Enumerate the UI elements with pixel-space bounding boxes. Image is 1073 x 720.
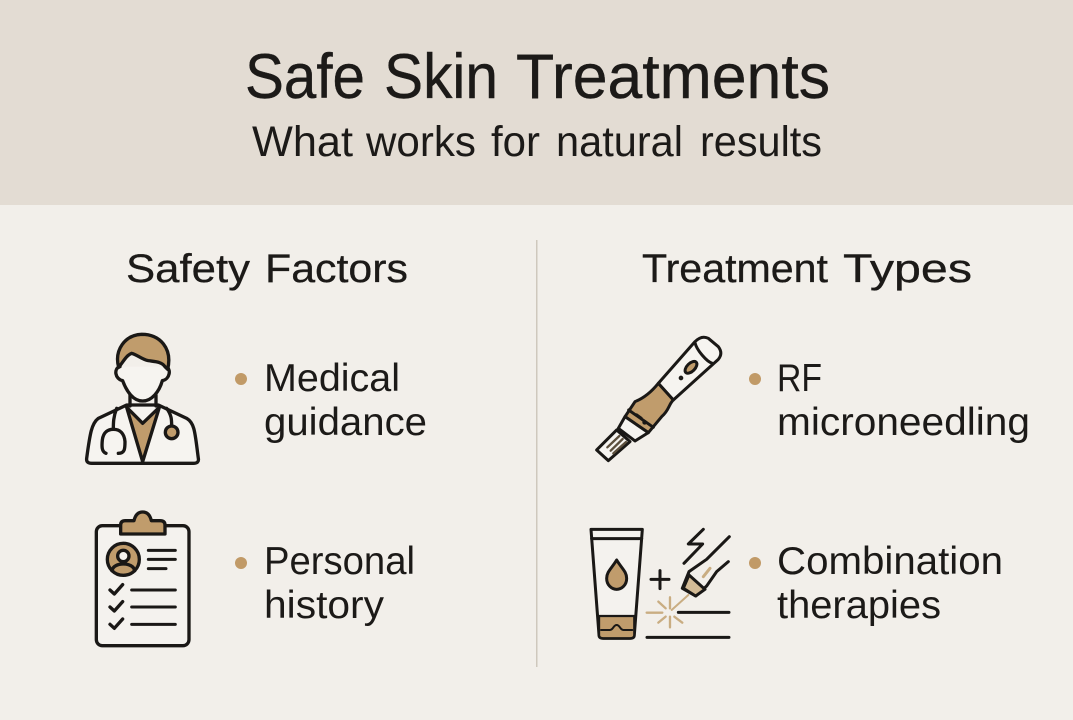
- panel: treatment types: [591, 247, 1030, 638]
- icon: clipboard: [96, 512, 189, 646]
- icon: cream plus energy device: [591, 529, 729, 638]
- title: Skin: [384, 42, 498, 112]
- bullet: [749, 373, 761, 385]
- label: medical guidance: guidance: [264, 401, 427, 444]
- subtitle: results: [700, 118, 822, 166]
- label: medical guidance: Medical: [264, 357, 400, 400]
- label: rf microneedling: [777, 357, 1030, 444]
- heading: safety factors: Factors: [265, 247, 408, 291]
- panel: safety factors: [87, 247, 427, 646]
- bullet: [235, 557, 247, 569]
- header band: [0, 0, 1073, 205]
- subtitle: for: [491, 118, 540, 166]
- label: rf microneedling: RF: [777, 357, 822, 400]
- label: personal history: Personal: [264, 540, 415, 583]
- bullet: [749, 557, 761, 569]
- heading: safety factors: Safety: [126, 247, 250, 291]
- label: combination therapies: [777, 540, 1003, 627]
- subtitle: What: [252, 118, 353, 166]
- heading: treatment types: Types: [843, 247, 972, 291]
- label: rf microneedling: microneedling: [777, 401, 1030, 444]
- subtitle: natural: [556, 118, 683, 166]
- label: medical guidance: [264, 357, 427, 444]
- bullet: [235, 373, 247, 385]
- label: combination therapies: Combination: [777, 540, 1003, 583]
- icon: doctor: [87, 334, 198, 463]
- title: Safe: [245, 42, 365, 112]
- heading: treatment types: Treatment: [642, 247, 828, 291]
- icon: microneedling pen: [597, 337, 721, 461]
- title: Treatments: [516, 42, 830, 112]
- subtitle: works: [365, 118, 476, 166]
- label: personal history: history: [264, 584, 385, 627]
- label: combination therapies: therapies: [777, 584, 941, 627]
- label: personal history: [264, 540, 415, 627]
